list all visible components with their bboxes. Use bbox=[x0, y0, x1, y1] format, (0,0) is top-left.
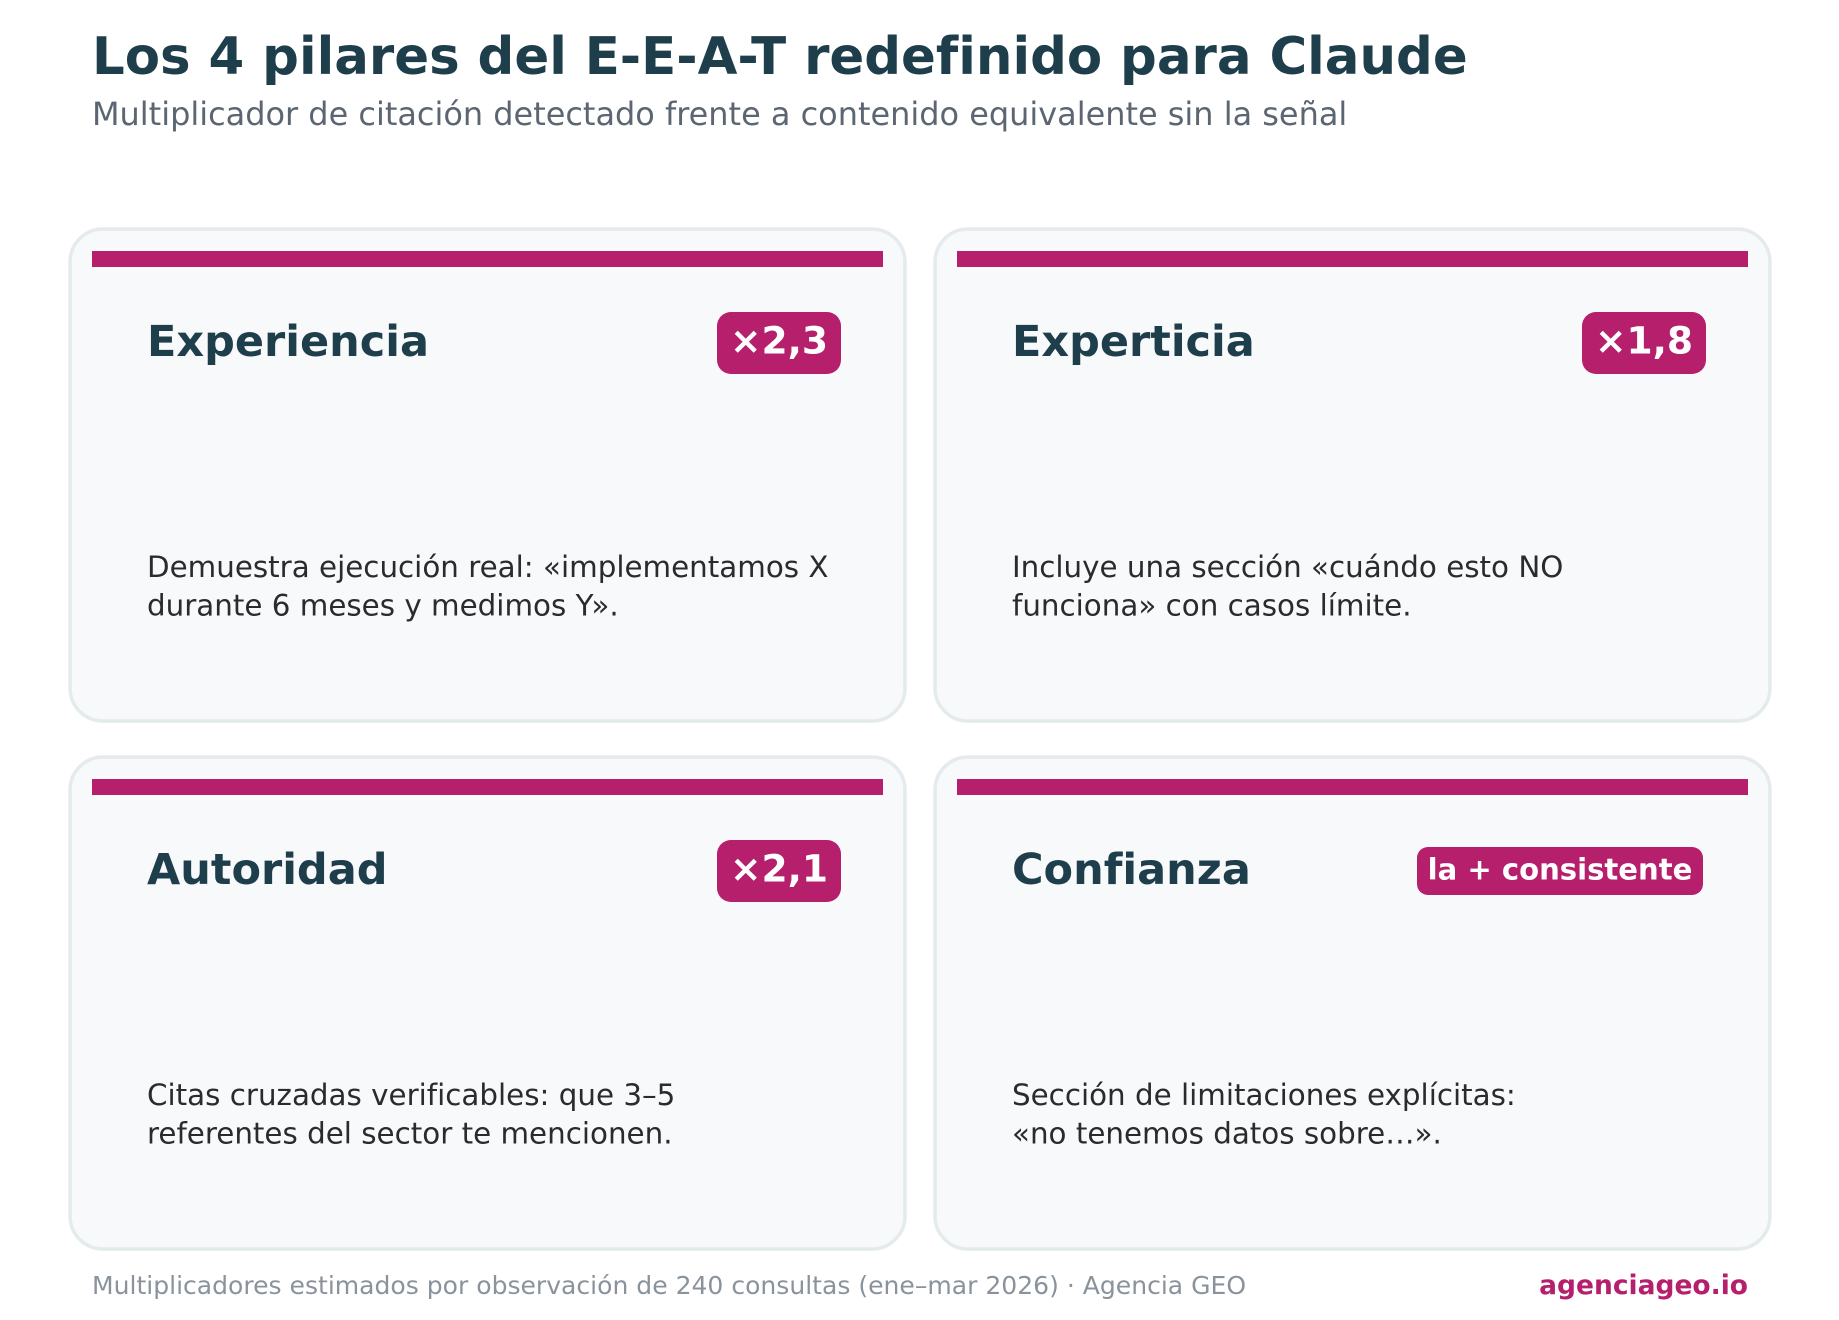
footer brand: agenciageo.io bbox=[1539, 1270, 1748, 1301]
heading: Experticia: Experticia bbox=[1012, 317, 1255, 367]
badge: x2,1 bbox=[717, 840, 841, 902]
description: Confianza: «no tenemos datos sobre…». bbox=[1012, 1116, 1442, 1150]
badge: x1,8: ×1,8 bbox=[1595, 318, 1693, 362]
badge: x2,3: ×2,3 bbox=[730, 318, 828, 362]
heading: Autoridad: Autoridad bbox=[147, 845, 388, 895]
badge: la + consistente: la + consistente bbox=[1428, 852, 1692, 886]
subtitle: Multiplicador de citación detectado frente a contenido equivalente sin la señal bbox=[92, 95, 1347, 133]
heading: Confianza: Confianza bbox=[1012, 845, 1251, 895]
panel: Experticia bbox=[935, 229, 1770, 721]
description: Experiencia: durante 6 meses y medimos Y». bbox=[147, 588, 619, 622]
badge: x1,8 bbox=[1582, 312, 1706, 374]
panel: Autoridad bbox=[70, 757, 905, 1249]
description: Confianza: Sección de limitaciones explícitas: bbox=[1012, 1078, 1516, 1112]
description: Autoridad: referentes del sector te mencionen. bbox=[147, 1116, 673, 1150]
footer note: Multiplicadores estimados por observación de 240 consultas (ene–mar 2026) · Agencia GEO bbox=[92, 1271, 1246, 1300]
panel: Confianza bbox=[935, 757, 1770, 1249]
heading: Experiencia: Experiencia bbox=[147, 317, 429, 367]
title: Los 4 pilares del E-E-A-T redefinido para Claude bbox=[92, 27, 1468, 87]
panel: Experiencia bbox=[70, 229, 905, 721]
description: Experticia: funciona» con casos límite. bbox=[1012, 588, 1412, 622]
description: Experticia: Incluye una sección «cuándo esto NO bbox=[1012, 550, 1563, 584]
description: Autoridad: Citas cruzadas verificables: que 3–5 bbox=[147, 1078, 675, 1112]
badge: x2,3 bbox=[717, 312, 841, 374]
badge: x2,1: ×2,1 bbox=[730, 846, 828, 890]
badge: la + consistente bbox=[1417, 847, 1703, 895]
description: Experiencia: Demuestra ejecución real: «implementamos X bbox=[147, 550, 829, 584]
